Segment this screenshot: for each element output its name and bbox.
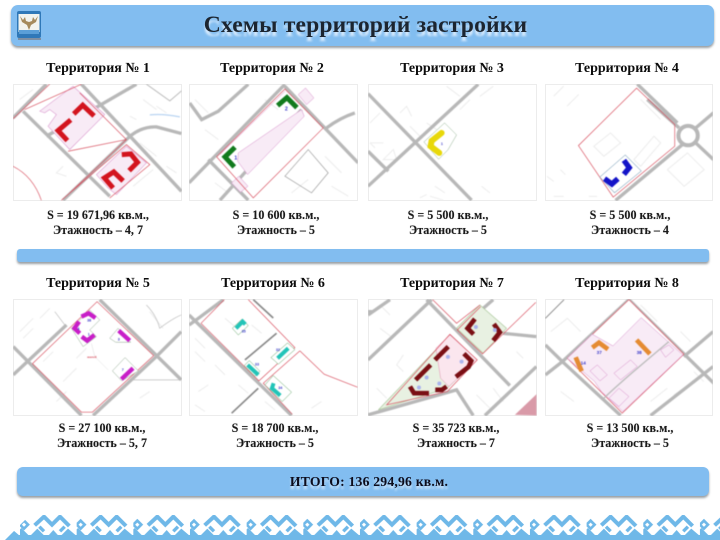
ornament: bottom folk pattern band <box>5 515 720 540</box>
map: territory 2: 1 <box>234 156 237 162</box>
caption: territory 3: Этажность – 5 <box>409 223 487 237</box>
map: territory 6: 33 <box>255 363 259 367</box>
divider bar <box>17 249 709 262</box>
map: territory 4 <box>545 84 713 200</box>
caption: territory 7: Этажность – 7 <box>417 436 495 450</box>
map: territory 6: 35 <box>242 329 246 333</box>
map: territory 5: 7 <box>122 368 124 372</box>
caption: territory 3 <box>408 208 488 237</box>
caption: territory 2: S = 10 600 кв.м., <box>233 208 319 222</box>
map: territory 3: 1 <box>441 142 443 146</box>
caption: territory 6: Этажность – 5 <box>236 436 314 450</box>
map: territory 8: 14 <box>580 361 586 366</box>
heading: territory 1: Территория № 1 <box>46 61 150 76</box>
heading: territory 2: Территория № 2 <box>220 61 324 76</box>
heading: territory 7: Территория № 7 <box>400 276 504 291</box>
map: territory 6 <box>189 299 358 416</box>
caption: territory 5: S = 27 100 кв.м., <box>59 421 145 435</box>
caption: territory 8: S = 13 500 кв.м., <box>587 421 673 435</box>
title: Схемы территорий застройки <box>204 12 527 38</box>
total text: ИТОГО: 136 294,96 кв.м. <box>290 474 448 489</box>
caption: territory 6: S = 18 700 кв.м., <box>232 421 318 435</box>
caption: territory 4: Этажность – 4 <box>591 223 669 237</box>
caption: territory 4 <box>590 208 670 237</box>
caption: territory 1 <box>47 208 149 237</box>
map: territory 5: 1 <box>88 333 90 337</box>
map: territory 2: 2 <box>285 107 288 113</box>
map: territory 2 <box>189 84 358 200</box>
map: territory 5: 4 <box>77 327 80 331</box>
caption: territory 2 <box>232 208 320 237</box>
caption: territory 8: Этажность – 5 <box>591 436 669 450</box>
map: territory 1 <box>13 84 182 200</box>
caption: territory 4: S = 5 500 кв.м., <box>590 208 670 222</box>
caption: territory 3: S = 5 500 кв.м., <box>408 208 488 222</box>
map: territory 3 <box>368 84 536 200</box>
title bar <box>11 5 714 46</box>
caption: territory 7 <box>412 421 500 450</box>
map: territory 7 <box>368 299 536 416</box>
map: territory 8: 37 <box>596 350 602 355</box>
caption: territory 8 <box>586 421 674 450</box>
caption: territory 2: Этажность – 5 <box>237 223 315 237</box>
map: territory 5: 38 <box>87 319 91 323</box>
heading: territory 5: Территория № 5 <box>46 276 150 291</box>
map: territory 5: жилой <box>86 355 97 359</box>
map: territory 5: 3 <box>118 337 120 341</box>
heading: territory 6: Территория № 6 <box>221 276 325 291</box>
caption: territory 1: S = 19 671,96 кв.м., <box>47 208 149 222</box>
heading: territory 4: Территория № 4 <box>575 61 679 76</box>
caption: territory 7: S = 35 723 кв.м., <box>413 421 499 435</box>
icon: municipal coat of arms <box>17 11 41 40</box>
caption: territory 6 <box>232 421 318 450</box>
map: territory 8: 38 <box>636 350 642 355</box>
map: territory 5 <box>13 299 182 416</box>
map: territory 6: 32 <box>276 348 280 352</box>
total bar <box>17 467 709 496</box>
map: territory 8 <box>545 299 713 416</box>
heading: territory 8: Территория № 8 <box>575 276 679 291</box>
caption: territory 5: Этажность – 5, 7 <box>57 436 147 450</box>
caption: territory 5 <box>57 421 147 450</box>
map: territory 6: 34 <box>278 386 283 390</box>
heading: territory 3: Территория № 3 <box>400 61 504 76</box>
caption: territory 1: Этажность – 4, 7 <box>53 223 143 237</box>
